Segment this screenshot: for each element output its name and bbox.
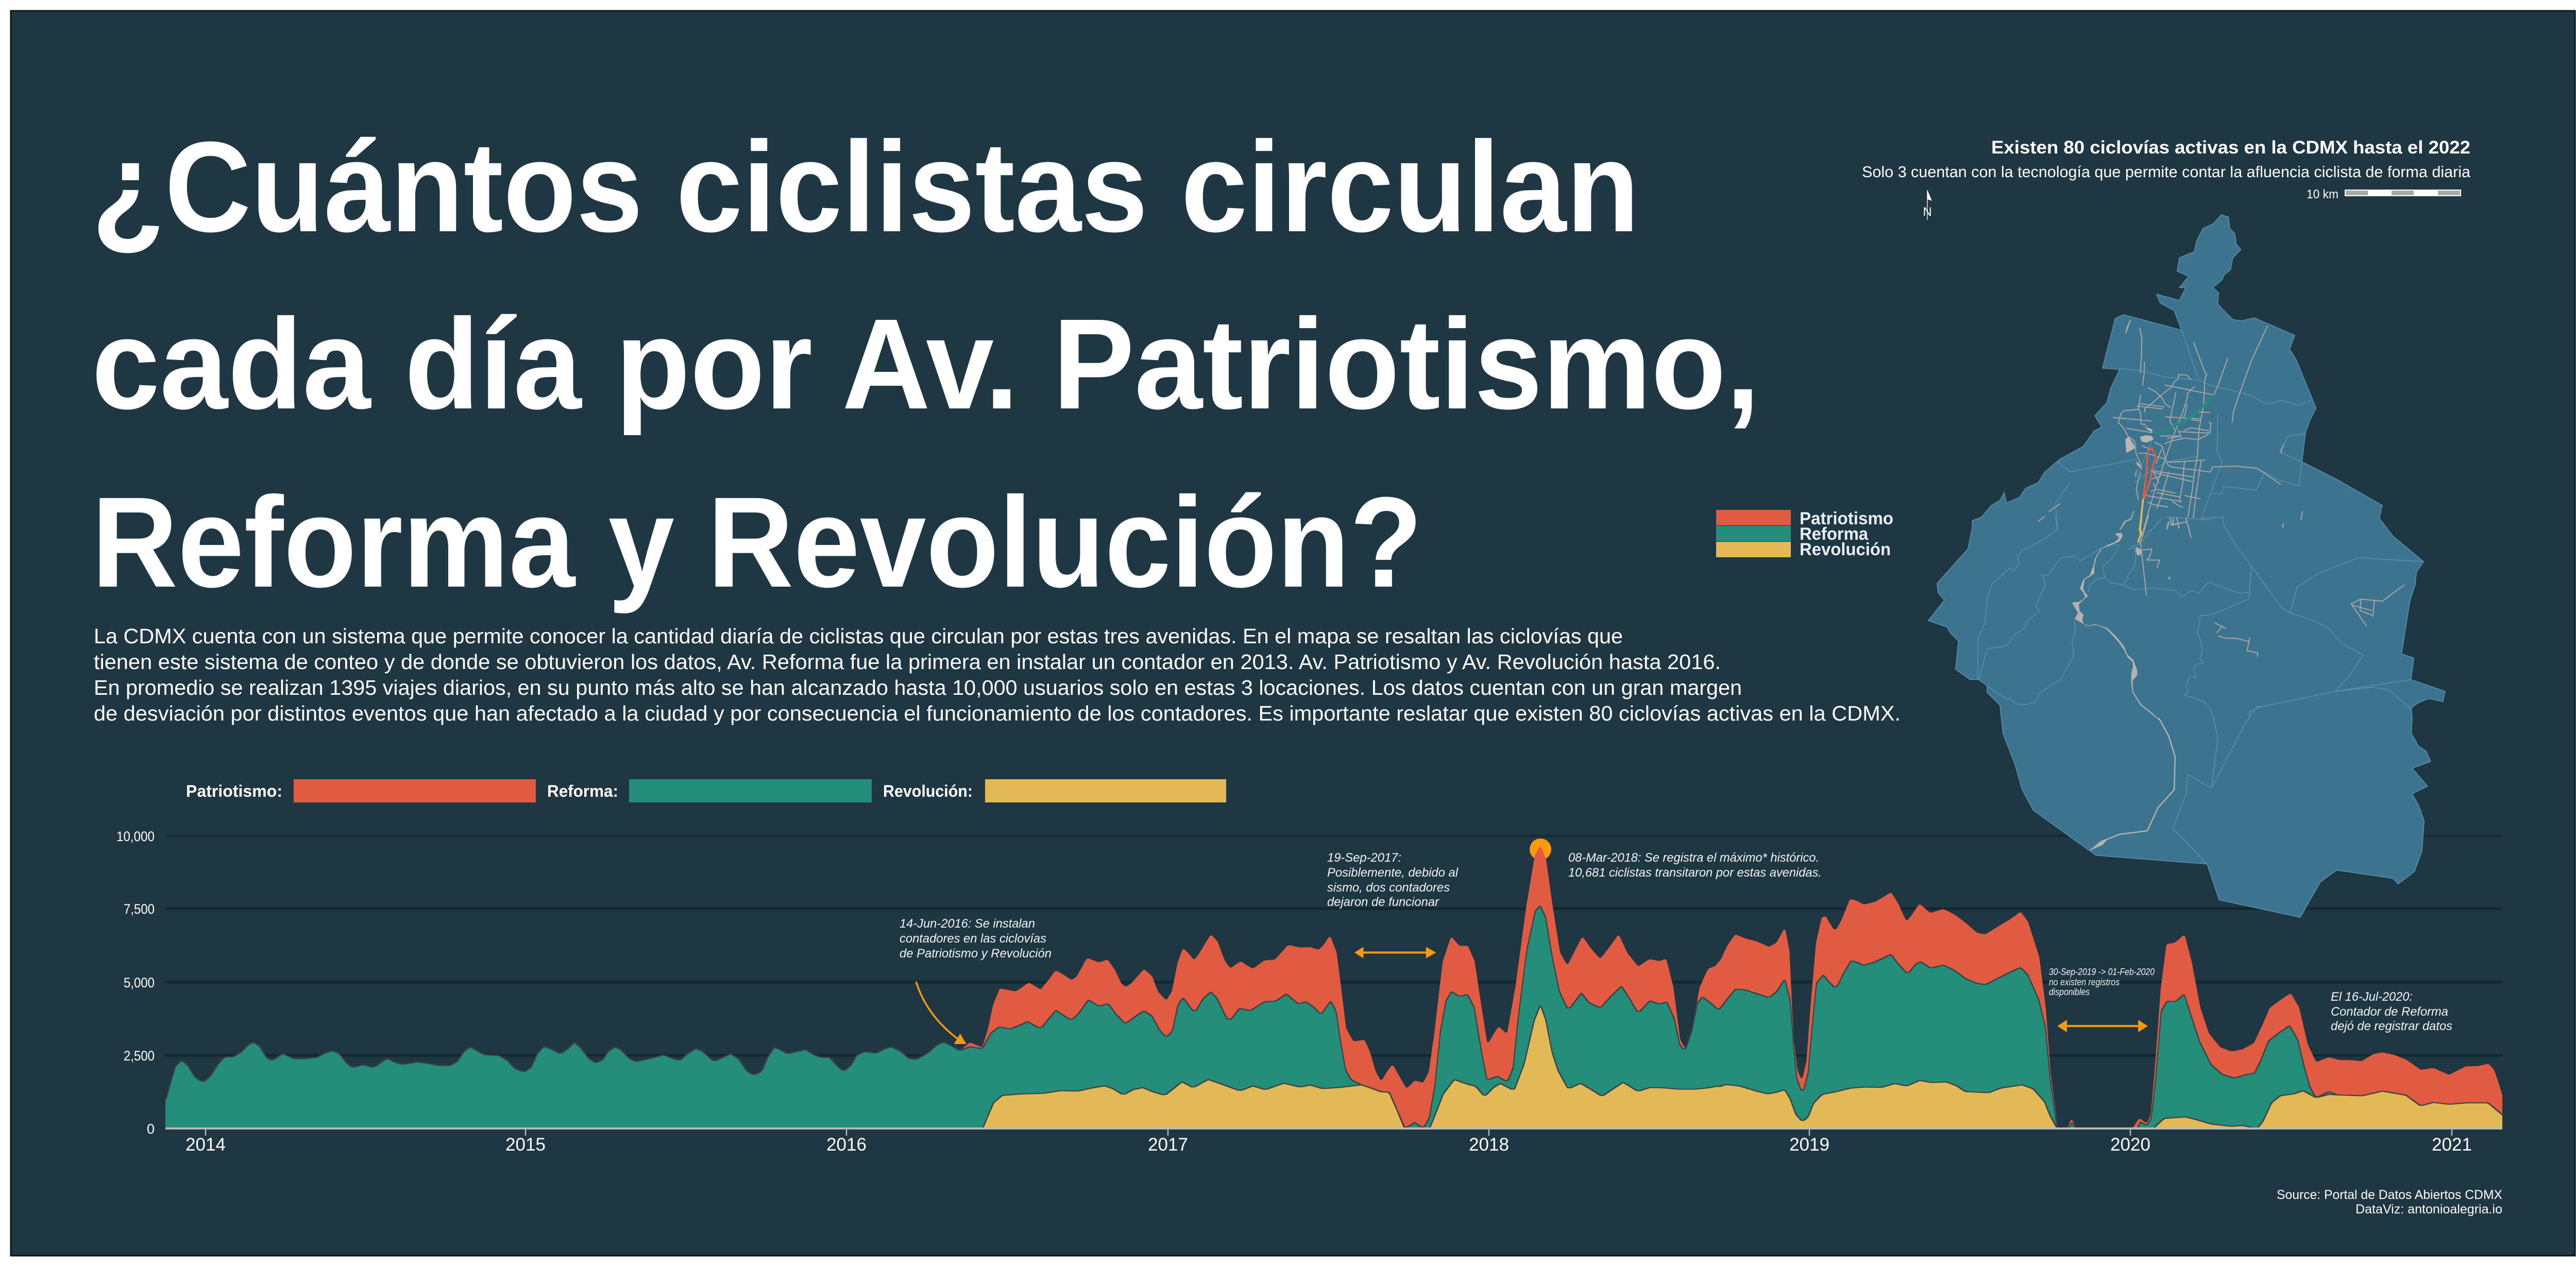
x axis: 2015 bbox=[505, 1135, 546, 1155]
intro text block: La CDMX cuenta con un sistema que permite conocer la cantidad diaría de ciclistas que circulan por estas tres avenidas. En el mapa se resaltan las ciclovías que bbox=[94, 624, 1623, 648]
river, southern stretch bbox=[2091, 718, 2175, 850]
y axis gridlines and labels: 7,500 bbox=[124, 901, 155, 917]
y axis gridlines and labels: 5,000 bbox=[124, 975, 155, 990]
annotation: 16-Jul-2020 bbox=[2331, 990, 2452, 1033]
annotation: 14-Jun-2016: contadores en las ciclovías bbox=[900, 932, 1046, 946]
stacked areas bbox=[156, 845, 2514, 1142]
highlighted lane: Patriotismo bbox=[2143, 447, 2156, 499]
annotation: 19-Sep-2017: dejaron de funcionar bbox=[1327, 895, 1439, 909]
y axis gridlines and labels: 0 bbox=[147, 1121, 155, 1137]
annotation: 08-Mar-2018 bbox=[1568, 851, 1822, 880]
annotation: 16-Jul-2020: dejó de registrar datos bbox=[2331, 1019, 2452, 1033]
x axis: 2019 bbox=[1789, 1135, 1829, 1155]
map heading: Existen 80 ciclovías activas en la CDMX hasta el 2022 bbox=[1991, 138, 2470, 158]
central lanes bbox=[2113, 320, 2284, 536]
annotation: 19-Sep-2017: 19-Sep-2017: bbox=[1327, 851, 1401, 865]
title: cada día por Av. Patriotismo, bbox=[92, 292, 1760, 436]
annotation: 08-Mar-2018: 08-Mar-2018: Se registra el máximo* histórico. bbox=[1568, 851, 1819, 865]
x axis bbox=[165, 1128, 2502, 1155]
peak marker bbox=[1530, 838, 1551, 860]
annotation: 16-Jul-2020: Contador de Reforma bbox=[2331, 1005, 2448, 1019]
x axis: 2016 bbox=[826, 1135, 867, 1155]
annotation: 14-Jun-2016: de Patriotismo y Revolución bbox=[900, 947, 1052, 961]
arrow: gap 2017 bbox=[1354, 947, 1436, 958]
annotation: 30-Sep-2019 bbox=[2049, 967, 2155, 997]
annotation: 14-Jun-2016: 14-Jun-2016: Se instalan bbox=[900, 917, 1035, 931]
annotation: 19-Sep-2017 bbox=[1327, 851, 1459, 909]
area: Reforma bbox=[156, 904, 2339, 1142]
map heading: Solo 3 cuentan con la tecnología que permite contar la afluencia ciclista de forma diaria bbox=[1862, 163, 2471, 181]
intro text block: En promedio se realizan 1395 viajes diarios, en su punto más alto se han alcanzado hasta 10,000 usuarios solo en estas 3 locaciones. Los datos cuentan con un gran margen bbox=[94, 676, 1742, 699]
map legend: Patriotismo bbox=[1800, 509, 1893, 528]
river and reservoirs bbox=[2072, 533, 2160, 721]
map heading bbox=[1862, 138, 2471, 181]
highlighted lane: Revolución bbox=[2140, 499, 2143, 536]
y axis gridlines and labels bbox=[116, 829, 2502, 1137]
annotation: 30-Sep-2019: 30-Sep-2019 -> 01-Feb-2020 bbox=[2049, 967, 2155, 977]
stacked area chart bbox=[116, 829, 2514, 1155]
x axis: 2018 bbox=[1469, 1135, 1509, 1155]
boroughs bbox=[1928, 215, 2445, 917]
arrow: gap 2019-2020 bbox=[2057, 1020, 2148, 1032]
scale bar bbox=[2307, 187, 2461, 201]
annotation: 30-Sep-2019: no existen registros bbox=[2049, 977, 2120, 987]
annotation: 16-Jul-2020: El 16-Jul-2020: bbox=[2331, 990, 2413, 1004]
annotation: 30-Sep-2019: disponibles bbox=[2049, 987, 2090, 997]
title bbox=[92, 115, 1760, 614]
source credits: DataViz: antonioalegria.io bbox=[2355, 1202, 2502, 1217]
arrow: 14-Jun-2016 bbox=[916, 982, 967, 1044]
x axis: 2014 bbox=[185, 1135, 226, 1155]
y axis gridlines and labels: 10,000 bbox=[116, 829, 155, 844]
chart legend: Patriotismo: bbox=[186, 782, 282, 800]
x axis: 2021 bbox=[2432, 1135, 2472, 1155]
scale bar: 10 km bbox=[2307, 187, 2338, 201]
map: CDMX cycle lanes bbox=[1928, 215, 2445, 917]
map legend: Revolución bbox=[1800, 540, 1891, 559]
north arrow bbox=[1923, 190, 1932, 220]
annotation: 08-Mar-2018: 10,681 ciclistas transitaron por estas avenidas. bbox=[1568, 866, 1822, 880]
highlighted lane: Revolución end bbox=[2138, 515, 2142, 543]
intro text block bbox=[94, 624, 1901, 725]
chart legend: Revolución: bbox=[883, 782, 973, 800]
chart legend bbox=[186, 779, 1226, 802]
area: Revolución bbox=[982, 1005, 2502, 1127]
source credits bbox=[2277, 1188, 2502, 1217]
north arrow: N bbox=[1923, 205, 1932, 219]
intro text block: tienen este sistema de conteo y de donde se obtuvieron los datos, Av. Reforma fue la primera en instalar un contador en 2013. Av. Patriotismo y Av. Revolución hasta 2016. bbox=[94, 650, 1721, 674]
annotation: 14-Jun-2016 bbox=[900, 917, 1052, 961]
title: Reforma y Revolución? bbox=[92, 470, 1422, 614]
area: Patriotismo bbox=[961, 845, 2514, 1141]
intro text block: de desviación por distintos eventos que han afectado a la ciudad y por consecuencia el funcionamiento de los contadores. Es importante reslatar que existen 80 ciclovías activas en la CDMX. bbox=[94, 701, 1901, 725]
annotation: 19-Sep-2017: Posiblemente, debido al bbox=[1327, 866, 1459, 880]
y axis gridlines and labels: 2,500 bbox=[124, 1048, 155, 1064]
chart legend: Reforma: bbox=[547, 782, 618, 800]
x axis: 2020 bbox=[2110, 1135, 2150, 1155]
highlighted lane: Reforma bbox=[2155, 395, 2214, 434]
annotation: 19-Sep-2017: sismo, dos contadores bbox=[1327, 881, 1450, 895]
peripheral lanes bbox=[2049, 321, 2404, 626]
map legend bbox=[1716, 509, 1893, 559]
title: ¿Cuántos ciclistas circulan bbox=[92, 115, 1639, 259]
source credits: Source: Portal de Datos Abiertos CDMX bbox=[2277, 1188, 2502, 1202]
map legend: Reforma bbox=[1800, 524, 1869, 544]
x axis: 2017 bbox=[1148, 1135, 1188, 1155]
southern map detail bbox=[2009, 515, 2267, 721]
